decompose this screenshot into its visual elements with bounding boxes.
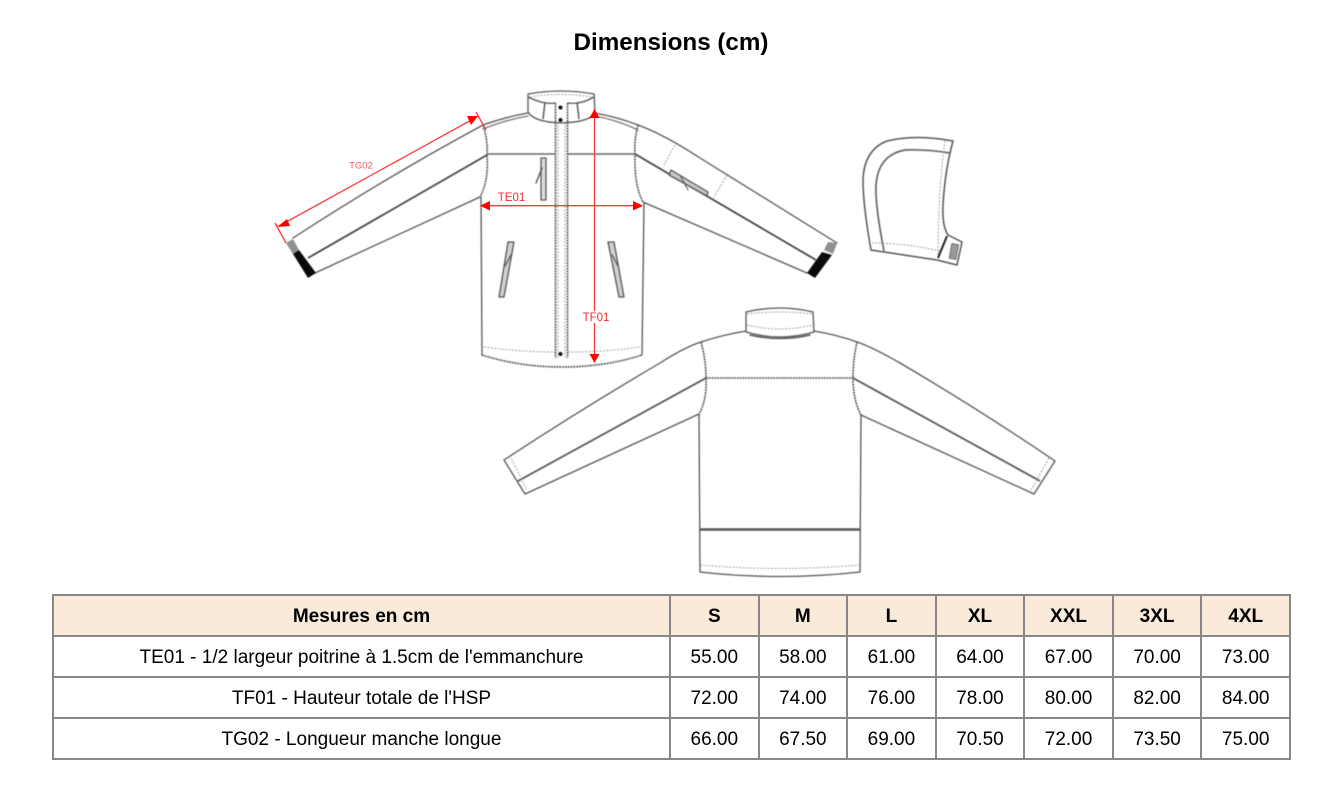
table header row: 3XL — [1140, 606, 1175, 626]
row: TG02: TG02 - Longueur manche longue — [222, 728, 501, 750]
back right sleeve — [814, 331, 1055, 494]
back left sleeve — [504, 331, 746, 494]
row: TF01: 72.00 — [690, 688, 738, 708]
table header row: M — [795, 606, 811, 626]
icon: front collar — [528, 91, 595, 123]
row: TF01: 84.00 — [1222, 688, 1269, 708]
row: TG02: 69.00 — [868, 728, 915, 750]
row: TF01: 76.00 — [868, 688, 915, 708]
row: TG02: 66.00 — [690, 728, 738, 750]
row: TE01: 55.00 — [690, 646, 738, 668]
measurement arrows — [275, 109, 643, 363]
front view of jacket — [286, 91, 837, 367]
table header row: XL — [968, 606, 992, 626]
back collar — [746, 308, 814, 338]
arrow: TF01 total height — [582, 109, 610, 363]
table header row: Mesures en cm — [293, 606, 430, 626]
title: Dimensions (cm) — [574, 29, 768, 56]
icon: right cuff — [807, 242, 837, 278]
row: TE01 — [139, 646, 1269, 668]
row: TG02: 72.00 — [1045, 728, 1092, 750]
icon: sleeve pocket — [663, 145, 727, 197]
row: TF01: 82.00 — [1133, 688, 1181, 708]
row: TE01: 67.00 — [1045, 646, 1092, 668]
icon: hood — [863, 138, 962, 265]
arrow: TF01 total height: TF01 — [583, 312, 609, 324]
arrow: TG02 sleeve length — [275, 112, 486, 243]
table header row: S — [708, 606, 721, 626]
row: TE01: 73.00 — [1222, 646, 1269, 668]
arrow: TE01 chest width — [480, 192, 643, 210]
row: TG02 — [222, 728, 1269, 750]
row: TE01: 70.00 — [1133, 646, 1181, 668]
row: TE01: TE01 - 1/2 largeur poitrine à 1.5cm de l'emmanchure — [139, 646, 584, 668]
row: TF01: 74.00 — [779, 688, 827, 708]
table header row: 4XL — [1228, 606, 1263, 626]
back body — [699, 342, 861, 576]
icon: left hip pocket — [499, 242, 514, 297]
back view of jacket — [504, 308, 1055, 576]
row: TF01: 80.00 — [1045, 688, 1092, 708]
arrow: TG02 sleeve length: TG02 — [349, 160, 373, 172]
arrow: TE01 chest width: TE01 — [498, 192, 525, 204]
row: TE01: 58.00 — [779, 646, 827, 668]
row: TG02: 75.00 — [1222, 728, 1269, 750]
row: TF01 — [232, 688, 1269, 708]
size table — [52, 594, 1291, 760]
row: TE01: 61.00 — [868, 646, 915, 668]
row: TG02: 70.50 — [956, 728, 1004, 750]
icon: placket snaps — [558, 106, 562, 356]
icon: left cuff — [286, 239, 316, 278]
table header row — [54, 596, 1289, 750]
row: TF01: TF01 - Hauteur totale de l'HSP — [232, 688, 491, 708]
row: TG02: 73.50 — [1133, 728, 1181, 750]
row: TG02: 67.50 — [779, 728, 827, 750]
row: TF01: 78.00 — [956, 688, 1004, 708]
jacket technical drawings — [274, 90, 1056, 578]
icon: chest pocket — [536, 158, 546, 200]
row: TE01: 64.00 — [956, 646, 1004, 668]
table header row: XXL — [1050, 606, 1087, 626]
icon: right hip pocket — [608, 242, 624, 297]
table header row: L — [886, 606, 897, 626]
